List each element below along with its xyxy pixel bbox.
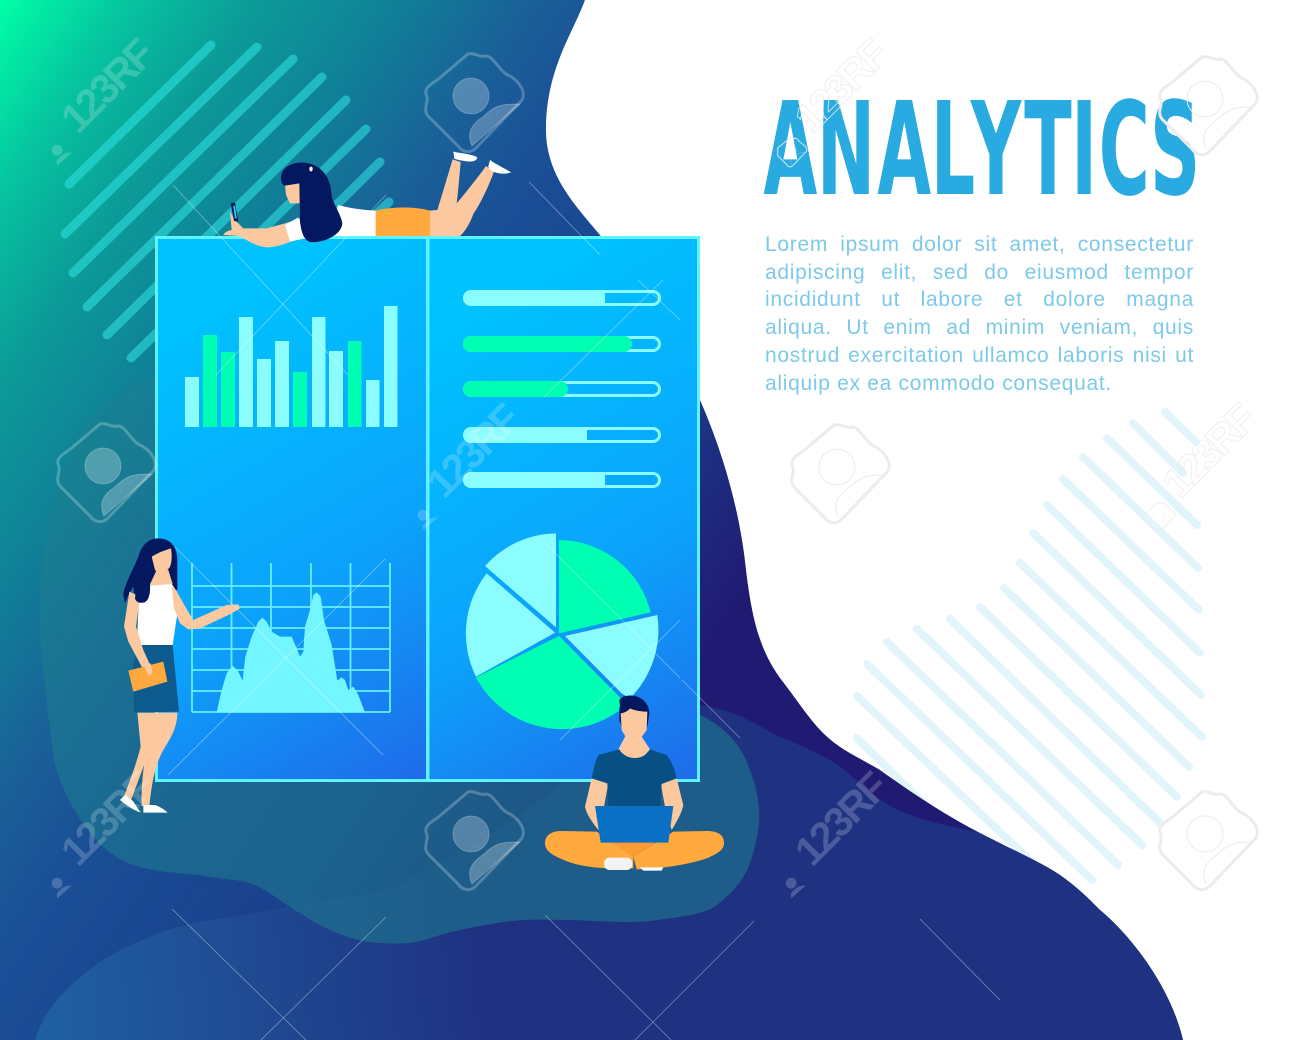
123RF stamps on dark	[44, 30, 898, 900]
123RF stamps on white	[778, 30, 1266, 532]
eggs on white	[792, 57, 1257, 890]
person: man with laptop	[545, 696, 724, 871]
body text: incididunt ut labore et dolore magna	[765, 288, 1194, 311]
body text: Lorem ipsum dolor sit amet, consectetur	[765, 233, 1194, 256]
area chart	[192, 563, 390, 712]
123RF stamps on dark: 123RF	[786, 763, 898, 874]
123RF stamps on white: 123RF	[786, 30, 898, 141]
body text: aliqua. Ut enim ad minim veniam, quis	[765, 316, 1194, 339]
lower navy blob	[35, 705, 1183, 1040]
top-left diagonal stripes	[65, 45, 389, 358]
body text: nostrud exercitation ullamco laboris nisi ut	[765, 344, 1194, 367]
left pane	[156, 238, 428, 780]
progress bars	[463, 290, 660, 488]
person: woman standing	[120, 538, 240, 813]
body text: aliquip ex ea commodo consequat.	[765, 372, 1112, 395]
teal blob	[40, 378, 759, 944]
123RF stamps on white: 123RF	[1154, 395, 1266, 506]
dashboard panel	[156, 238, 698, 780]
person: woman lying on panel	[223, 152, 511, 247]
123RF stamps on dark: 123RF	[52, 30, 164, 141]
eggs on dark	[58, 54, 523, 890]
123RF stamps on dark: 123RF	[418, 395, 530, 506]
right pane	[428, 238, 698, 780]
pie chart	[466, 533, 658, 729]
cross lines	[168, 182, 1000, 1040]
right-side pale stripes	[857, 412, 1202, 880]
body text: adipiscing elit, sed do eiusmod tempor	[765, 261, 1194, 284]
body text	[765, 233, 1194, 395]
title: ANALYTICS	[763, 76, 1200, 225]
bar chart	[185, 306, 398, 427]
123RF stamps on dark: 123RF	[52, 763, 164, 874]
